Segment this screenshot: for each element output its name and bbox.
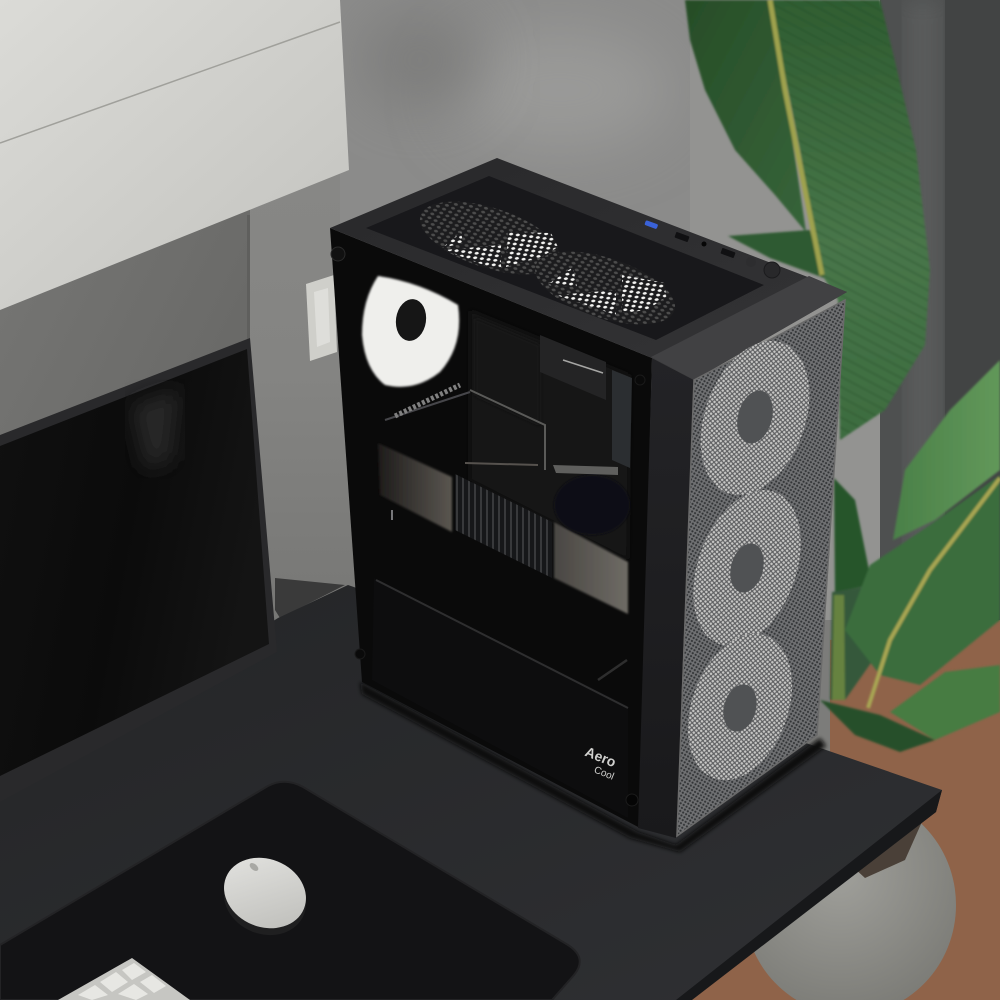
glass thumbscrew upper right (635, 375, 645, 385)
top mesh panel (366, 176, 764, 340)
base foliage behind stems (830, 585, 880, 700)
graphics card fan (554, 475, 630, 535)
stem (832, 595, 845, 700)
graphics card heatsink (455, 474, 552, 578)
white rear fan (362, 276, 459, 387)
front pillar (638, 358, 694, 838)
reflection on glass (391, 510, 393, 520)
case shadow (360, 682, 826, 852)
top fan 1 blades (442, 232, 558, 268)
curtain (880, 0, 1000, 640)
graphics card end (554, 522, 628, 614)
front I/O ports (644, 220, 780, 278)
front fan 3 (669, 619, 811, 795)
monitor (0, 338, 277, 802)
top face (330, 158, 847, 380)
graphics card top bar (553, 465, 618, 475)
large back leaf midrib (770, 0, 822, 275)
AeroCool logo: Aero (583, 743, 618, 770)
concrete pot (744, 795, 956, 1000)
front fan 2 (673, 475, 821, 661)
PC case (330, 158, 847, 852)
shroud highlight (376, 580, 628, 708)
desk (0, 578, 942, 1000)
keyboard (58, 958, 190, 1000)
large back leaf lower-left (728, 230, 824, 278)
rear bracket area (475, 318, 540, 425)
large back leaf left half (685, 0, 806, 232)
desk mat (0, 782, 580, 1000)
right upper leaf (893, 360, 1000, 540)
right leaf midrib (868, 478, 1000, 708)
glass interior haze (470, 310, 630, 560)
top fan 2 blades (547, 267, 666, 315)
plant leaves (685, 0, 1000, 752)
top front bevel (651, 276, 847, 380)
lower right leaf (890, 665, 1000, 740)
light switch (306, 275, 337, 361)
mouse (213, 846, 317, 947)
large back leaf right half (770, 0, 930, 440)
leaf veins (770, 0, 930, 440)
AeroCool logo: Cool (592, 765, 615, 783)
top fan 2 dim ring (526, 237, 684, 339)
white wall panel (0, 0, 349, 310)
power supply shroud (372, 578, 628, 818)
front mesh panel (677, 300, 845, 836)
right middle leaf (845, 475, 1000, 685)
glass thumbscrew bottom right (626, 794, 638, 806)
graphics card shroud (378, 443, 452, 532)
motherboard details (385, 335, 632, 470)
glass side panel (330, 228, 652, 828)
small leaf behind case (834, 478, 872, 592)
lower dark leaf (820, 700, 935, 752)
small shelf highlight (598, 660, 627, 680)
glass thumbscrew top (331, 247, 345, 261)
glass thumbscrew bottom left (355, 649, 365, 659)
top fan 1 dim ring (411, 187, 569, 289)
front fan 1 (681, 326, 829, 510)
AeroCool logo (578, 743, 622, 783)
wood floor (680, 620, 1000, 1000)
